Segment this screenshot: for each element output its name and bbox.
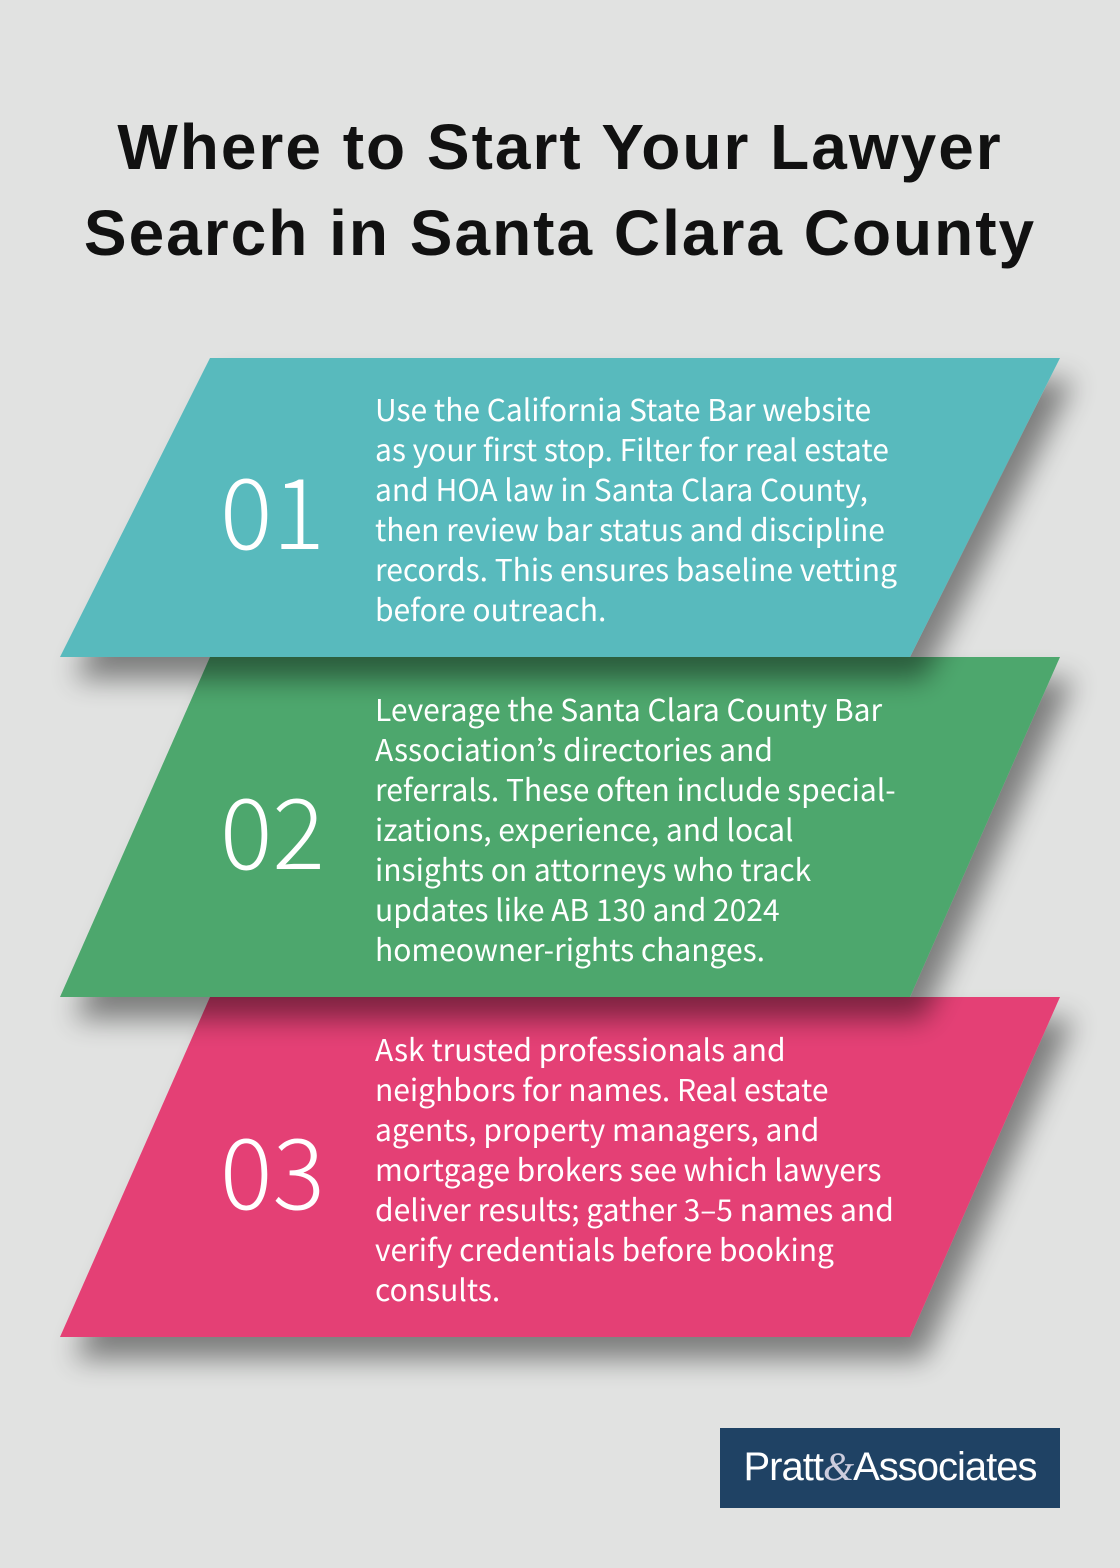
panel 3 text: consults. bbox=[375, 1266, 500, 1310]
panel 2 text: Association’s directories and bbox=[375, 726, 773, 770]
title: Search in Santa Clara County bbox=[84, 197, 1036, 269]
panel 2 text: Leverage the Santa Clara County Bar bbox=[375, 686, 882, 730]
panel 3 text: mortgage brokers see which lawyers bbox=[375, 1146, 881, 1190]
logo: Pratt&Associates bbox=[743, 1444, 1037, 1489]
panel 1 text: as your first stop. Filter for real estate bbox=[375, 426, 889, 470]
panel 2 text: referrals. These often include special- bbox=[375, 766, 896, 810]
panel 1 text: then review bar status and discipline bbox=[375, 506, 885, 550]
panel 3 text: agents, property managers, and bbox=[375, 1106, 819, 1150]
panel 1 text bbox=[375, 386, 897, 630]
panel 3 text bbox=[375, 1026, 894, 1310]
panel 2 number: 02 bbox=[220, 756, 325, 898]
panel 2 text: homeowner-rights changes. bbox=[375, 926, 765, 970]
panel 2 shape bbox=[60, 657, 1060, 997]
title: Where to Start Your Lawyer bbox=[117, 111, 1003, 183]
panel 2 text: updates like AB 130 and 2024 bbox=[375, 886, 780, 930]
panel 3 text: deliver results; gather 3–5 names and bbox=[375, 1186, 894, 1230]
panel 1 number: 01 bbox=[220, 436, 325, 578]
panel 2 text: insights on attorneys who track bbox=[375, 846, 811, 890]
panel 1 shape bbox=[60, 358, 1060, 657]
panel 1 text: records. This ensures baseline vetting bbox=[375, 546, 897, 590]
panel 1 text: Use the California State Bar website bbox=[375, 386, 871, 430]
panel 3 text: neighbors for names. Real estate bbox=[375, 1066, 828, 1110]
panel 3 number: 03 bbox=[220, 1096, 325, 1238]
panel 3 text: Ask trusted professionals and bbox=[375, 1026, 786, 1070]
title bbox=[84, 111, 1036, 269]
panel 3 text: verify credentials before booking bbox=[375, 1226, 834, 1270]
panel 1 text: and HOA law in Santa Clara County, bbox=[375, 466, 868, 510]
panel 3 shape bbox=[60, 997, 1060, 1337]
panel 2 text: izations, experience, and local bbox=[375, 806, 794, 850]
panel 1 text: before outreach. bbox=[375, 586, 606, 630]
logo bbox=[720, 1428, 1060, 1508]
panel 2 text bbox=[375, 686, 896, 970]
